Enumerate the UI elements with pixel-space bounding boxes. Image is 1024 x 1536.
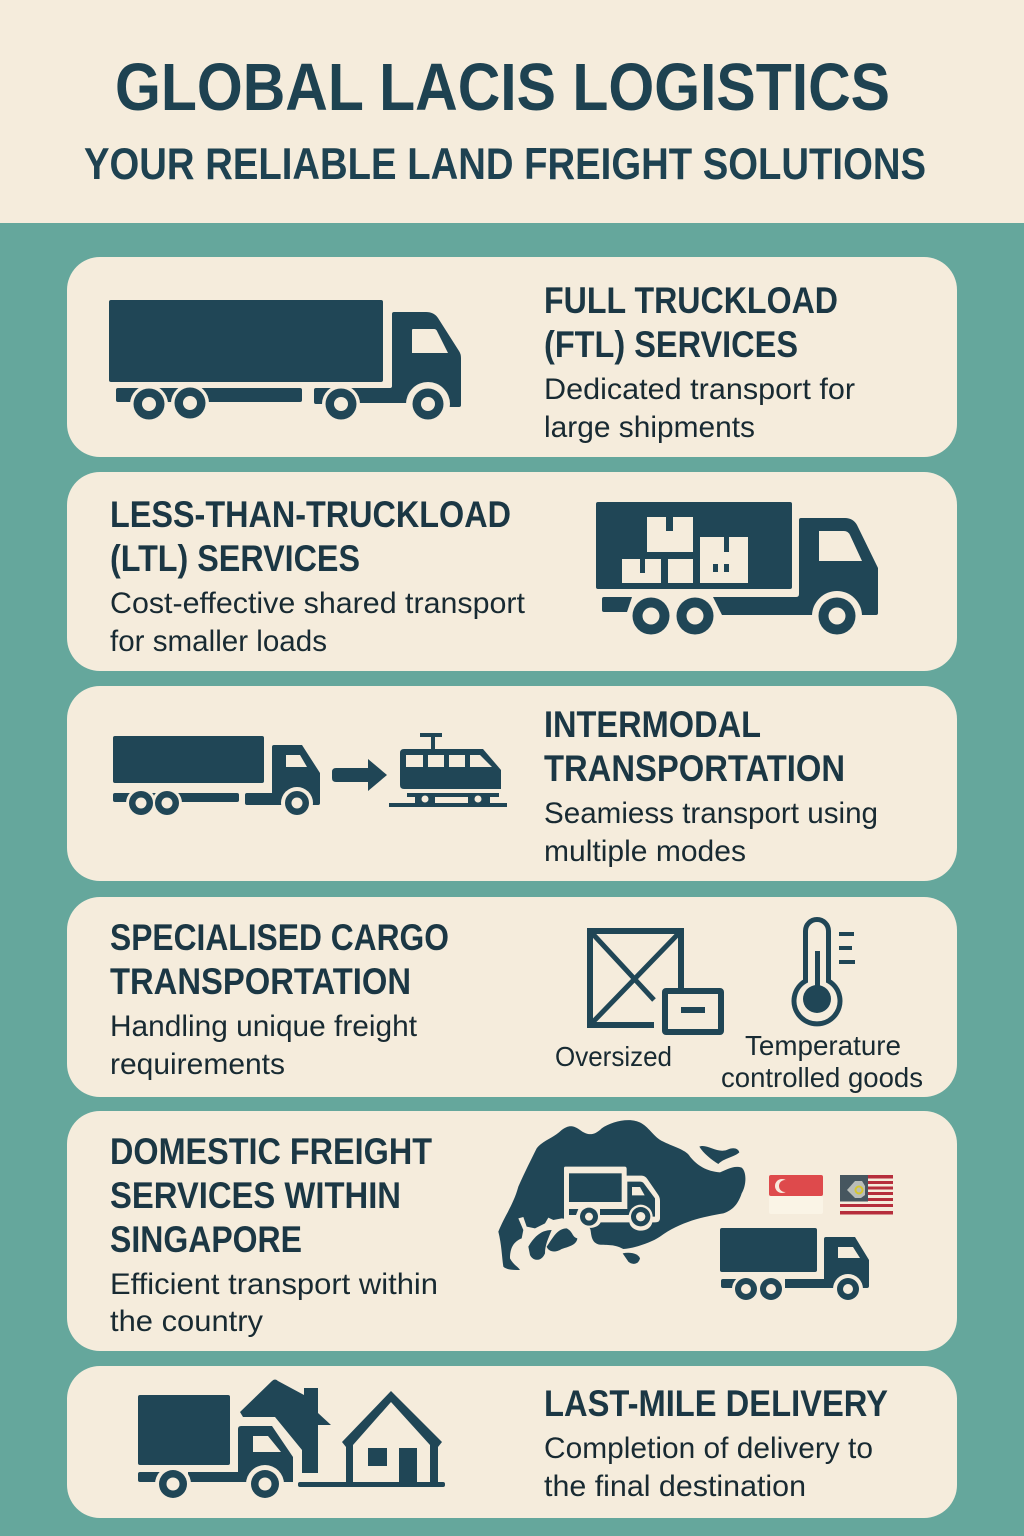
icon: articulated truck (109, 300, 461, 426)
panel: specialised cargo (67, 897, 957, 1097)
heading (544, 704, 845, 789)
icon: outline house (298, 1391, 445, 1487)
label: temperature controlled goods: Temperature (745, 1030, 901, 1061)
heading (110, 1131, 432, 1260)
icon: malaysia flag (840, 1175, 893, 1215)
icon: truck and houses (138, 1380, 445, 1503)
description: Dedicated transport for (544, 373, 855, 406)
arrow (332, 759, 387, 791)
heading (110, 917, 449, 1002)
description: the final destination (544, 1470, 806, 1503)
icon: singapore map with truck (498, 1120, 745, 1270)
icon: thermometer (794, 920, 855, 1024)
description: Cost-effective shared transport (110, 587, 526, 620)
panel: domestic freight (67, 1111, 957, 1351)
heading: SERVICES WITHIN (110, 1175, 401, 1216)
heading: SINGAPORE (110, 1219, 302, 1260)
heading: FULL TRUCKLOAD (544, 280, 838, 321)
heading: (LTL) SERVICES (110, 538, 360, 579)
icon: truck to train (113, 733, 507, 819)
icon: train (389, 733, 507, 807)
description: for smaller loads (110, 625, 327, 658)
heading: (FTL) SERVICES (544, 324, 798, 365)
heading (544, 280, 838, 365)
icon: singapore flag (769, 1175, 823, 1214)
icon: oversized crate (590, 931, 721, 1032)
description: Seamiess transport using (544, 797, 878, 830)
panel: less than truckload (67, 472, 957, 671)
label: temperature controlled goods (721, 1030, 923, 1093)
title: GLOBAL LACIS LOGISTICS (115, 50, 890, 125)
panel: full truckload (67, 257, 957, 457)
description (544, 373, 855, 444)
description: requirements (110, 1048, 285, 1081)
label: oversized: Oversized (555, 1041, 672, 1072)
heading: TRANSPORTATION (110, 961, 411, 1002)
heading: LESS-THAN-TRUCKLOAD (110, 494, 511, 535)
heading: SPECIALISED CARGO (110, 917, 449, 958)
description: the country (110, 1305, 263, 1338)
heading: DOMESTIC FREIGHT (110, 1131, 432, 1172)
heading: INTERMODAL (544, 704, 761, 745)
description: Efficient transport within (110, 1268, 438, 1301)
heading: LAST-MILE DELIVERY (544, 1383, 888, 1424)
description (544, 1432, 873, 1503)
heading (110, 494, 511, 579)
icon: truck (720, 1228, 869, 1304)
label: temperature controlled goods: controlled goods (721, 1062, 923, 1093)
header band (0, 0, 1024, 223)
icon: solid house (240, 1380, 331, 1473)
icon: truck (113, 736, 320, 819)
panel: last mile delivery (67, 1366, 957, 1518)
description: multiple modes (544, 835, 746, 868)
description: Handling unique freight (110, 1010, 418, 1043)
description (544, 797, 878, 868)
description (110, 587, 526, 658)
description: Completion of delivery to (544, 1432, 873, 1465)
description (110, 1010, 418, 1081)
panel: intermodal (67, 686, 957, 881)
icon: box truck with parcels (596, 502, 878, 641)
heading: TRANSPORTATION (544, 748, 845, 789)
description (110, 1268, 438, 1338)
description: large shipments (544, 411, 755, 444)
icon: delivery truck (138, 1395, 293, 1503)
